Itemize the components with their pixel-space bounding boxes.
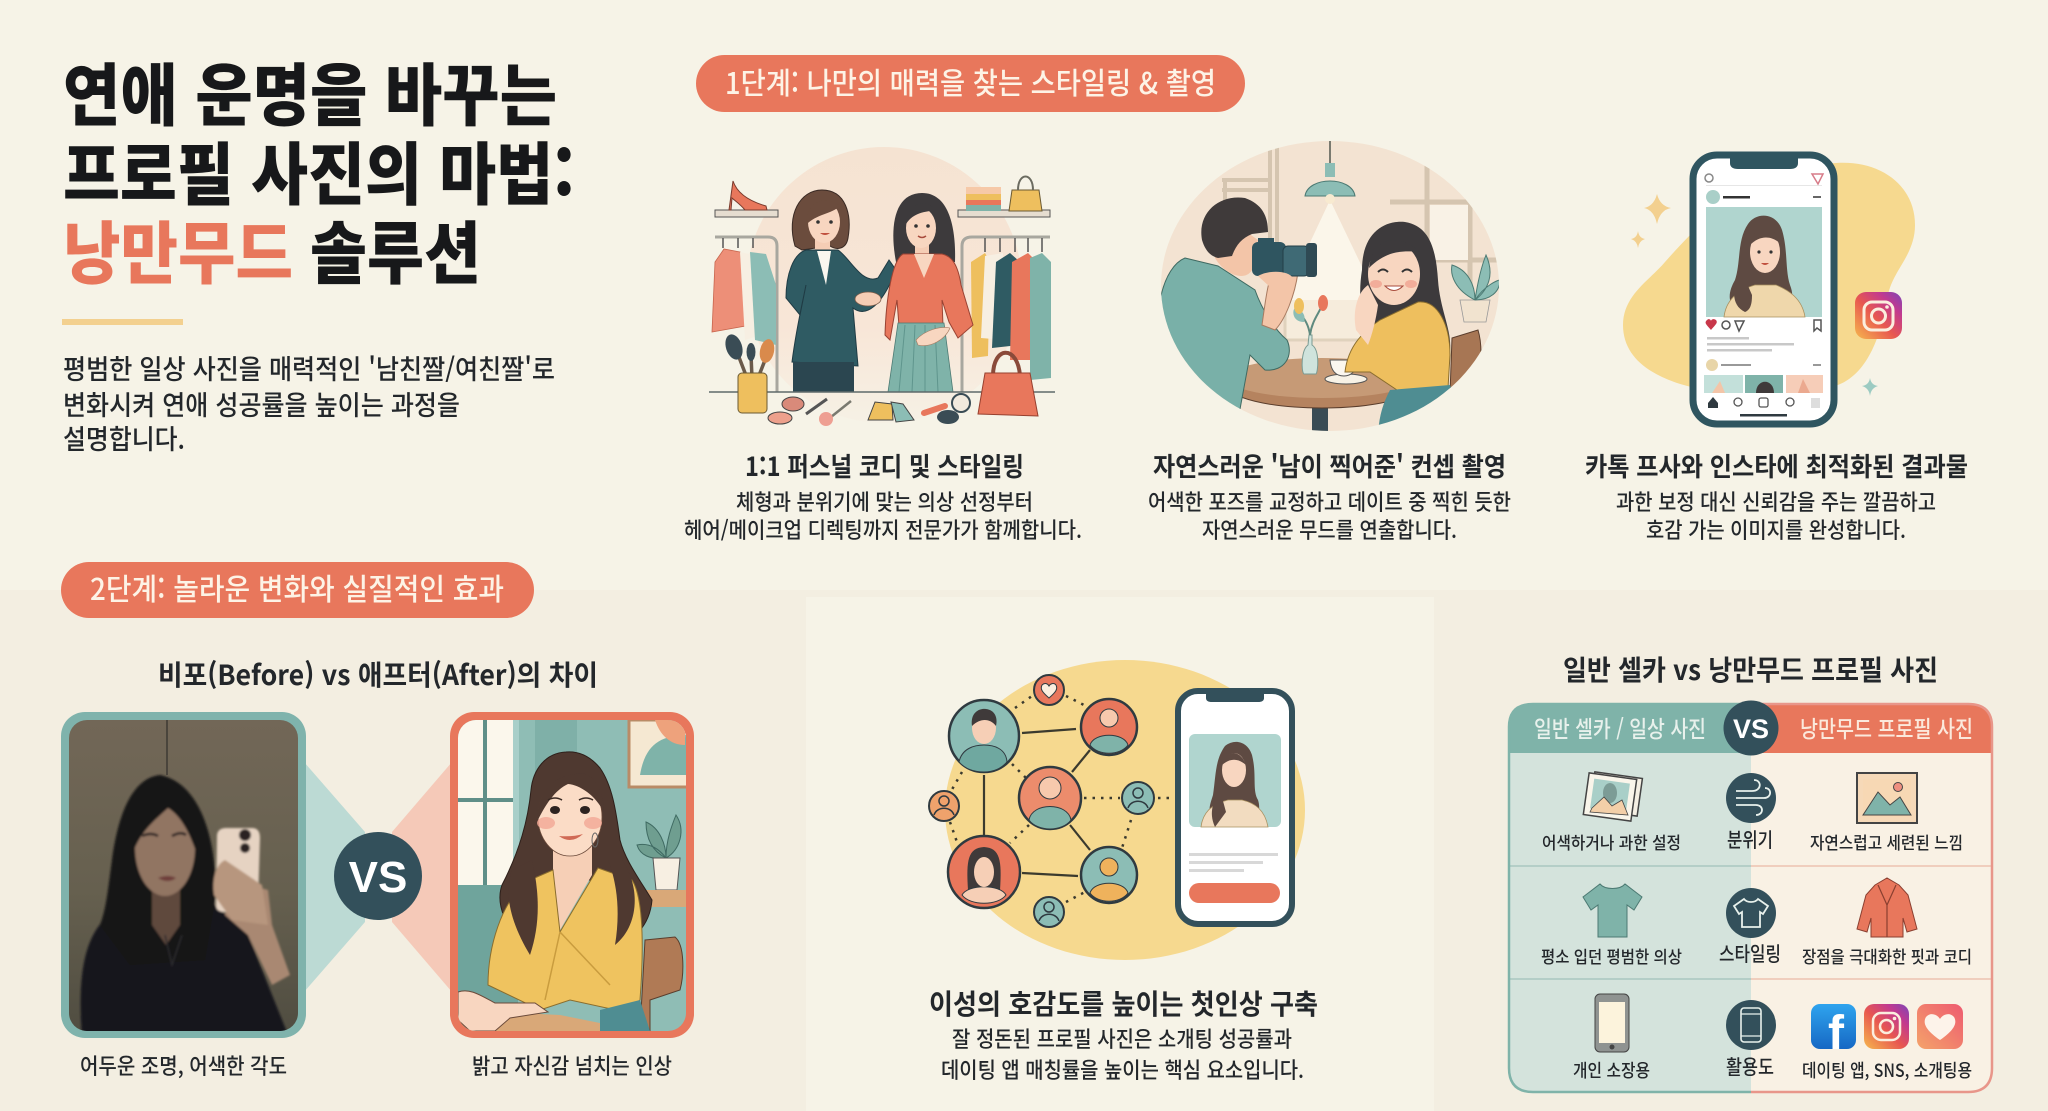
- before caption: 어두운 조명, 어색한 각도: [80, 1049, 287, 1081]
- after caption: 밝고 자신감 넘치는 인상: [472, 1049, 672, 1081]
- node: small teal person: [1122, 782, 1154, 814]
- title underline: [62, 319, 183, 325]
- caption: results: 과한 보정 대신 신뢰감을 주는 깔끔하고: [1616, 485, 1936, 517]
- heading: 비포(Before) vs 애프터(After)의 차이: [158, 654, 598, 694]
- cosmetics on table: [768, 394, 970, 426]
- dark top: [81, 905, 288, 1035]
- caption: photo shoot: 어색한 포즈를 교정하고 데이트 중 찍힌 듯한: [1148, 485, 1511, 517]
- window: [458, 720, 519, 1031]
- caption: photo shoot: 자연스러운 '남이 찍어준' 컨셉 촬영: [1153, 447, 1506, 484]
- icon: t-shirt: [1583, 884, 1642, 937]
- heading and description: 이성의 호감도를 높이는 첫인상 구축: [929, 983, 1318, 1023]
- after illustration: [450, 712, 694, 1038]
- node: center person: [1019, 767, 1081, 829]
- illustration: optimized profile on a phone: [1623, 155, 1915, 424]
- node: heart: [1034, 675, 1064, 705]
- heading: 일반 셀카 vs 낭만무드 프로필 사진: [1563, 649, 1938, 689]
- header vs badge: VS: [1733, 714, 1769, 744]
- caption: results: 호감 가는 이미지를 완성합니다.: [1646, 513, 1906, 545]
- illustration: natural photo shoot in a cafe: [1160, 141, 1500, 440]
- left clothes rack: [712, 237, 777, 392]
- phone with profile: [1178, 691, 1292, 924]
- node: man: [949, 700, 1019, 772]
- table header labels: 일반 셀카 / 일상 사진: [1534, 710, 1706, 744]
- icon: instagram: [1855, 292, 1902, 339]
- forearm: [225, 880, 290, 985]
- icon: blazer: [1857, 878, 1917, 937]
- icon: dating app heart: [1917, 1004, 1963, 1049]
- post action icons: [1706, 319, 1717, 330]
- heading and description: 잘 정돈된 프로필 사진은 소개팅 성공률과: [952, 1022, 1292, 1054]
- row 1: [1542, 772, 1963, 854]
- icon: usage phone: [1726, 1000, 1776, 1050]
- vs badge: VS: [349, 853, 407, 902]
- makeup brush cup: [722, 332, 776, 413]
- yellow circle backdrop: [945, 660, 1305, 960]
- node: coral person top right: [1081, 699, 1137, 755]
- row 2: 평소 입던 평범한 의상: [1541, 943, 1682, 968]
- panel: comparison table: [1508, 649, 1993, 1093]
- light cone: [1292, 204, 1362, 300]
- potted plant on desk: [637, 815, 690, 907]
- table header labels: 낭만무드 프로필 사진: [1800, 710, 1973, 744]
- intro text: 평범한 일상 사진을 매력적인 '남친짤/여친짤'로: [63, 348, 555, 387]
- window frames: [1222, 141, 1499, 340]
- before photo: [61, 712, 306, 1038]
- panel: first impression network: [929, 660, 1318, 1085]
- icon: plain phone: [1595, 994, 1629, 1052]
- node: woman: [948, 836, 1020, 908]
- photographer man: [1161, 198, 1317, 409]
- node: teal person bottom: [1081, 847, 1137, 903]
- connector: coral wedge: [392, 762, 452, 992]
- table background: [1508, 703, 1993, 1093]
- caption: styling: 체형과 분위기에 맞는 의상 선정부터: [736, 485, 1033, 517]
- caption: styling: [684, 447, 1082, 545]
- row 1: 자연스럽고 세련된 느낌: [1810, 829, 1963, 854]
- intro text: 설명합니다.: [63, 418, 185, 457]
- row 2: 스타일링: [1719, 938, 1781, 967]
- icon: facebook: f: [1828, 1007, 1845, 1060]
- connection lines: [950, 696, 1173, 902]
- heading and description: 데이팅 앱 매칭률을 높이는 핵심 요소입니다.: [941, 1053, 1304, 1085]
- icon: facebook: [1811, 1004, 1856, 1060]
- node: small orange person: [929, 791, 959, 821]
- chair: [640, 937, 683, 1031]
- profile photo in post: [1706, 207, 1822, 317]
- yellow blob: [1623, 163, 1915, 393]
- woman with long hair: [488, 752, 652, 1012]
- panel: center background: [806, 597, 1434, 1111]
- face and neck: [152, 885, 180, 945]
- caption: styling: 헤어/메이크업 디렉팅까지 전문가가 함께합니다.: [684, 513, 1082, 545]
- caption: photo shoot: 자연스러운 무드를 연출합니다.: [1202, 513, 1457, 545]
- floor line: [709, 391, 1055, 393]
- caption: results: 카톡 프사와 인스타에 최적화된 결과물: [1585, 447, 1968, 484]
- stylist woman: [786, 190, 896, 392]
- phone: [1693, 155, 1834, 424]
- thumbnail row: [1704, 375, 1743, 393]
- right clothes rack: [962, 237, 1051, 392]
- lower band background: [0, 590, 2048, 1111]
- sparkles: [1631, 194, 1878, 396]
- table header labels: [1534, 710, 1973, 744]
- bottom nav: [1708, 397, 1718, 408]
- hair: [99, 774, 216, 925]
- wall picture: [629, 720, 689, 787]
- icon: instagram small: [1864, 1004, 1909, 1049]
- icon: atmosphere wind: [1726, 773, 1776, 823]
- row 1: 분위기: [1727, 824, 1773, 853]
- caption: results: [1585, 447, 1968, 545]
- icon: messy photos: [1583, 772, 1642, 821]
- row 2: [1541, 878, 1972, 968]
- step 2 pill: 2단계: 놀라운 변화와 실질적인 효과: [90, 565, 504, 609]
- intro text: 변화시켜 연애 성공률을 높이는 과정을: [63, 384, 460, 423]
- heading and description: [929, 983, 1318, 1085]
- chair and plant: [1450, 255, 1500, 394]
- caption: styling: 1:1 퍼스널 코디 및 스타일링: [745, 447, 1024, 484]
- row 3: 활용도: [1726, 1051, 1774, 1080]
- icon: styling shirt: [1726, 888, 1776, 938]
- right shelf with folded clothes and bag: [958, 176, 1050, 217]
- title: 낭만무드: [63, 199, 293, 298]
- row 2: 장점을 극대화한 핏과 코디: [1802, 943, 1972, 968]
- icon: landscape picture: [1857, 773, 1917, 823]
- step 1 pill: 1단계: 나만의 매력을 찾는 스타일링 & 촬영: [725, 59, 1216, 103]
- illustration: stylist and client in a boutique: [709, 147, 1055, 426]
- title: 연애 운명을 바꾸는: [63, 41, 557, 140]
- client woman: [885, 193, 973, 392]
- laughing woman: [1344, 222, 1451, 425]
- title: 솔루션: [310, 199, 481, 298]
- table: [1242, 358, 1396, 431]
- red tote bag: [978, 353, 1038, 416]
- left shelf with shoe: [715, 181, 778, 217]
- row 1: 어색하거나 과한 설정: [1542, 829, 1681, 854]
- phone: [216, 828, 260, 912]
- header vs badge: [1724, 700, 1778, 756]
- vs badge: [334, 832, 422, 920]
- table and folded hands: [458, 991, 650, 1035]
- caption: photo shoot: [1148, 447, 1511, 545]
- row 3: 개인 소장용: [1573, 1057, 1650, 1083]
- intro text: [63, 348, 555, 457]
- hand: [213, 860, 268, 925]
- connector: teal wedge: [304, 762, 365, 992]
- panel: before and after: [61, 654, 694, 1081]
- pendant lamp: [1305, 141, 1355, 204]
- node: small teal person bottom: [1034, 897, 1064, 927]
- row 3: 데이팅 앱, SNS, 소개팅용: [1802, 1057, 1972, 1083]
- title: [63, 41, 575, 298]
- title: 프로필 사진의 마법:: [63, 120, 575, 219]
- coffee cup: [1325, 360, 1367, 384]
- row 3: [1573, 994, 1972, 1083]
- vase and flowers: [1293, 295, 1328, 374]
- table border: [1509, 704, 1992, 1092]
